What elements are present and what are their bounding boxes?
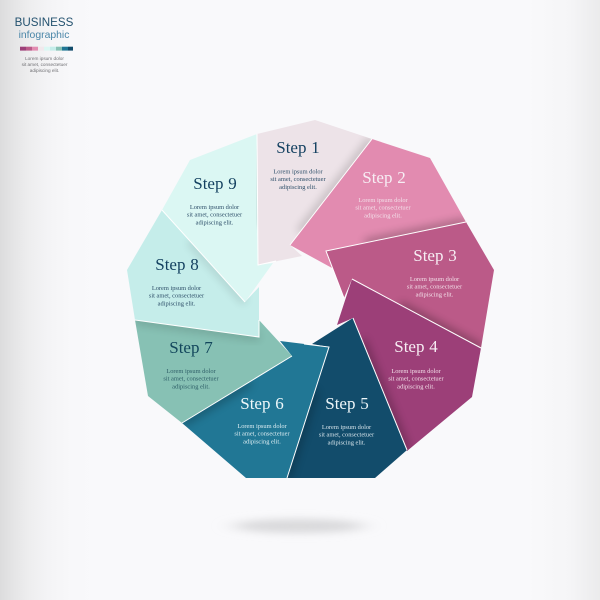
step 8 segment: Lorem ipsum dolor <box>152 285 202 292</box>
step 1 segment <box>257 120 372 265</box>
step 3 segment: Step 3 <box>413 246 457 265</box>
step 7 segment: Step 7 <box>169 338 213 357</box>
step 8 segment <box>127 210 259 337</box>
step 6 segment: adipiscing elit. <box>243 438 281 445</box>
step 4 segment <box>337 279 481 451</box>
step 5 segment: Lorem ipsum dolor <box>322 424 372 431</box>
step 4 segment: Step 4 <box>394 337 438 356</box>
step 9 segment: sit amet, consectetuer <box>187 212 243 219</box>
step 7 segment <box>135 320 292 423</box>
step 2 segment: sit amet, consectetuer <box>355 205 411 212</box>
step 3 segment <box>326 222 494 348</box>
step 1 segment: Step 1 <box>276 138 320 157</box>
header block <box>15 16 74 73</box>
step 9 segment: Lorem ipsum dolor <box>190 204 240 211</box>
header description: adipiscing elit. <box>30 68 59 73</box>
step 5 segment <box>287 318 407 478</box>
step 8 segment: adipiscing elit. <box>158 300 196 307</box>
step 7 segment: sit amet, consectetuer <box>163 376 219 383</box>
step 4 segment: sit amet, consectetuer <box>388 376 444 383</box>
step 6 segment: Lorem ipsum dolor <box>237 423 288 430</box>
step 3 segment: Lorem ipsum dolor <box>410 276 460 283</box>
step 2 segment <box>290 139 466 268</box>
subheading: infographic: infographic <box>19 30 69 41</box>
step 5 segment: Step 5 <box>325 394 369 413</box>
step 5 segment: adipiscing elit. <box>328 439 366 446</box>
step 3 segment: sit amet, consectetuer <box>407 284 463 291</box>
header description: sit amet, consectetuer <box>22 62 68 67</box>
step 3 segment: adipiscing elit. <box>416 291 454 298</box>
step 6 segment: sit amet, consectetuer <box>234 431 290 438</box>
step 4 segment: Lorem ipsum dolor <box>391 368 442 375</box>
step 9 segment: adipiscing elit. <box>196 219 234 226</box>
step 9 segment <box>162 134 276 302</box>
heading: BUSINESS: BUSINESS <box>15 16 74 29</box>
ground shadow <box>233 519 365 533</box>
step 6 segment <box>182 341 329 478</box>
step 6 segment: Step 6 <box>240 394 284 413</box>
step 9 segment: Step 9 <box>193 174 237 193</box>
step 8 segment: sit amet, consectetuer <box>149 293 205 300</box>
step 8 segment: Step 8 <box>155 255 199 274</box>
colour strip <box>20 47 73 51</box>
step 4 segment: adipiscing elit. <box>397 383 435 390</box>
step 1 segment: Lorem ipsum dolor <box>273 168 324 176</box>
step 7 segment: Lorem ipsum dolor <box>166 368 217 375</box>
step 2 segment: Step 2 <box>362 168 406 187</box>
step 1 segment: adipiscing elit. <box>279 184 317 191</box>
step 2 segment: adipiscing elit. <box>364 212 402 219</box>
step 2 segment: Lorem ipsum dolor <box>358 197 409 204</box>
step 7 segment: adipiscing elit. <box>172 383 210 390</box>
header description: Lorem ipsum dolor <box>25 56 64 61</box>
step 1 segment: sit amet, consectetuer <box>270 176 326 183</box>
step 5 segment: sit amet, consectetuer <box>319 432 375 439</box>
